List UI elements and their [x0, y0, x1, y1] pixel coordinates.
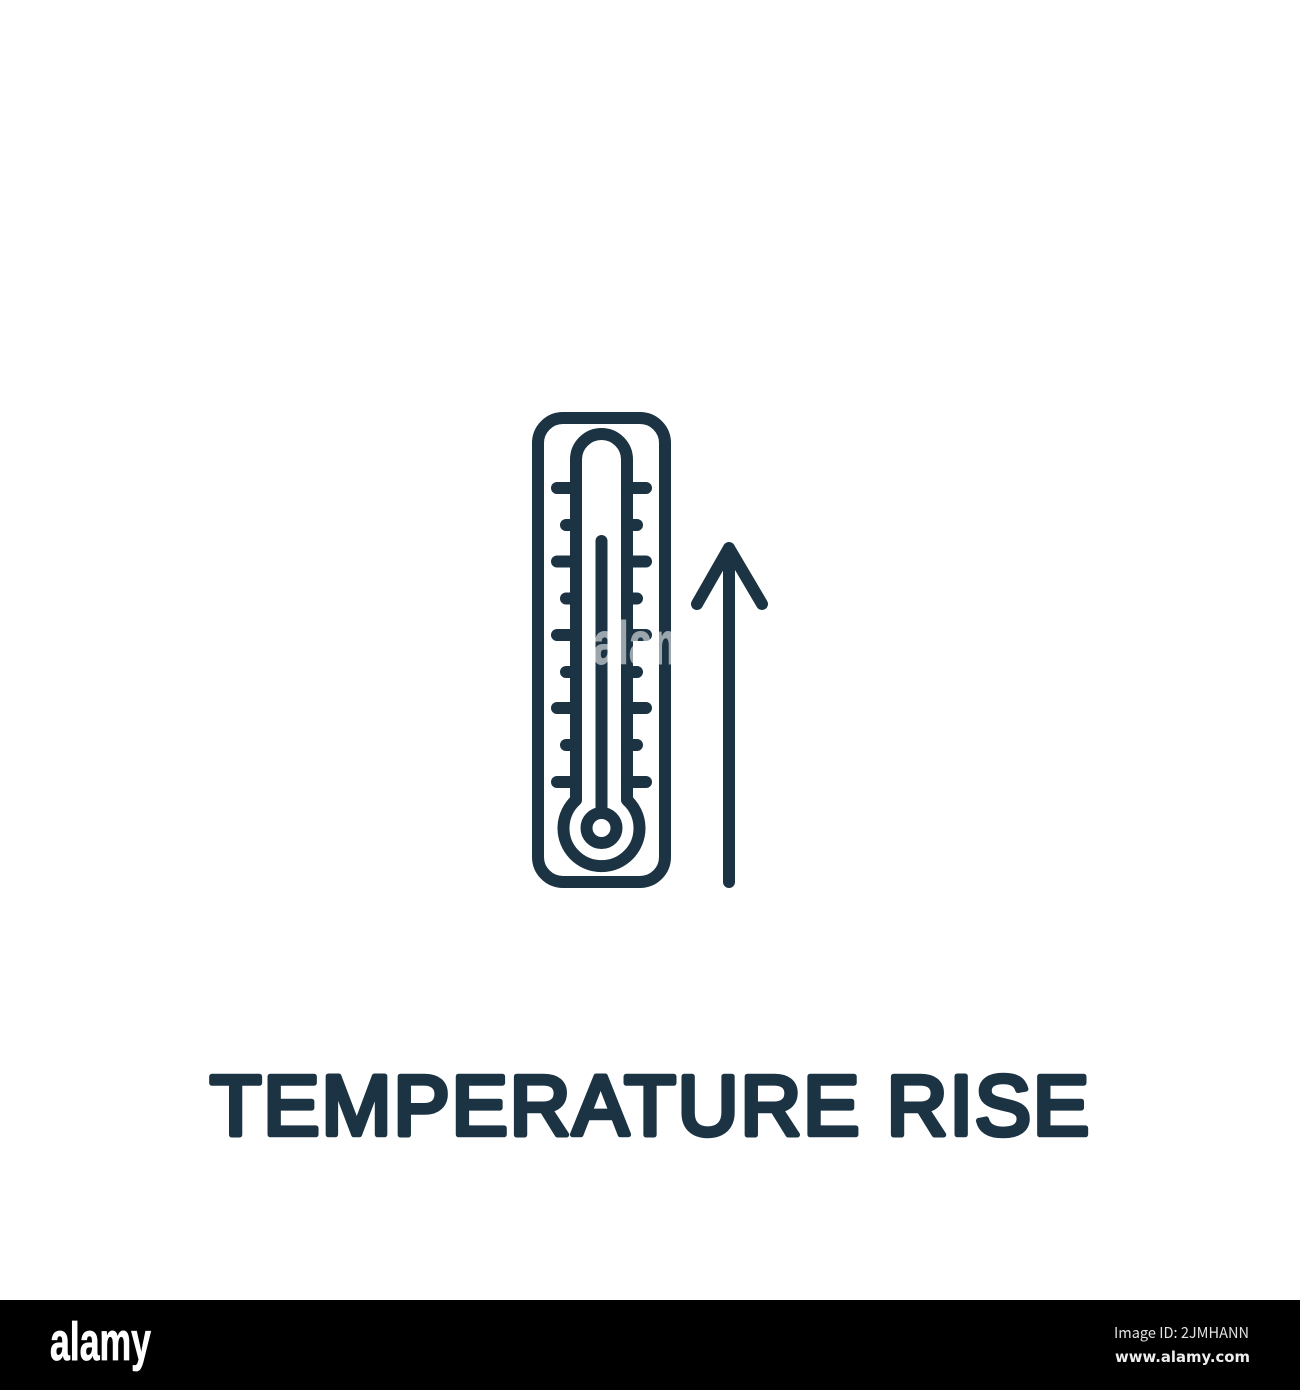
- title: TEMPERATURE RISE: [210, 1058, 1089, 1152]
- icon: upward arrow: [697, 548, 762, 882]
- mercury bulb: [586, 813, 616, 843]
- watermark over icon: alamy: [593, 610, 715, 677]
- temperature scale ticks: [557, 488, 646, 782]
- mercury stem: [596, 541, 608, 812]
- thermometer tube and bulb: [564, 434, 640, 866]
- footer bar: [0, 1300, 1300, 1390]
- website: www.alamy.com: [1115, 1348, 1250, 1366]
- image id: Image ID: 2JMHANN: [1114, 1322, 1249, 1343]
- footer logo: alamy: [50, 1312, 151, 1372]
- icon: thermometer: [538, 418, 665, 882]
- thermometer backing plate: [538, 418, 665, 882]
